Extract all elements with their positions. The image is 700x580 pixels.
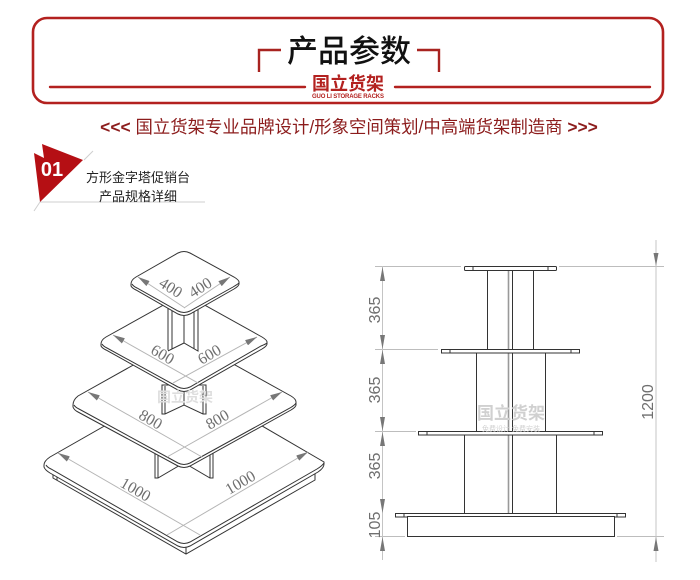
elevation legs <box>464 270 556 513</box>
elevation platforms <box>396 266 626 536</box>
isometric dimension labels: 400 <box>156 275 185 302</box>
isometric dimensions <box>58 277 308 535</box>
isometric dimension labels: 800 <box>136 407 165 433</box>
elevation dimension labels: 1200 <box>640 384 657 420</box>
800 dims <box>88 392 282 457</box>
1000 dims <box>58 452 308 535</box>
watermark left: 国立货架 <box>157 389 213 405</box>
section badge 01: 01 <box>41 159 63 181</box>
elevation dimension labels: 105 <box>367 512 384 538</box>
section caption: 方形金字塔促销台 <box>86 170 190 185</box>
title: 产品参数 <box>287 34 411 69</box>
elevation dimension labels: 365 <box>367 297 384 323</box>
section caption <box>86 170 190 204</box>
title brackets <box>259 50 439 72</box>
elevation dimension labels <box>367 297 657 538</box>
platform 800 <box>73 338 296 468</box>
legs under 400 <box>168 305 198 351</box>
400 dims <box>138 277 230 308</box>
elevation drawing <box>396 266 626 536</box>
elevation dimension labels: 365 <box>367 453 384 479</box>
section badge 01 <box>34 144 205 211</box>
base plinth <box>53 470 315 554</box>
brand logo: GUO LI STORAGE RACKS <box>312 94 384 100</box>
legs under 800 <box>155 450 213 478</box>
isometric dimension labels: 1000 <box>117 475 153 505</box>
header rules <box>50 86 650 88</box>
legs under 600 <box>162 385 206 414</box>
platform 400 <box>131 252 239 316</box>
platform 600 <box>101 296 267 392</box>
platform 1000 <box>44 382 324 548</box>
header panel <box>33 18 663 103</box>
isometric dimension labels: 800 <box>203 407 232 433</box>
isometric dimension labels <box>117 275 259 505</box>
isometric dimension labels: 1000 <box>223 468 259 498</box>
isometric drawing <box>44 252 324 554</box>
brand logo: 国立货架 <box>312 73 384 94</box>
watermark right: 国立货架 <box>477 403 545 423</box>
watermark right: 免费设计 免费安装 <box>482 424 540 433</box>
elevation dimension labels: 365 <box>367 377 384 403</box>
watermark right <box>477 403 545 433</box>
isometric dimension labels: 600 <box>148 342 177 368</box>
600 dims <box>113 335 257 383</box>
isometric dimension labels: 400 <box>186 275 215 302</box>
isometric dimension labels: 600 <box>195 342 224 368</box>
tagline: <<< 国立货架专业品牌设计/形象空间策划/中高端货架制造商 >>> <box>100 117 598 137</box>
dimension arrows <box>380 253 658 551</box>
elevation dimensions <box>375 240 664 562</box>
section caption: 产品规格详细 <box>99 189 177 204</box>
